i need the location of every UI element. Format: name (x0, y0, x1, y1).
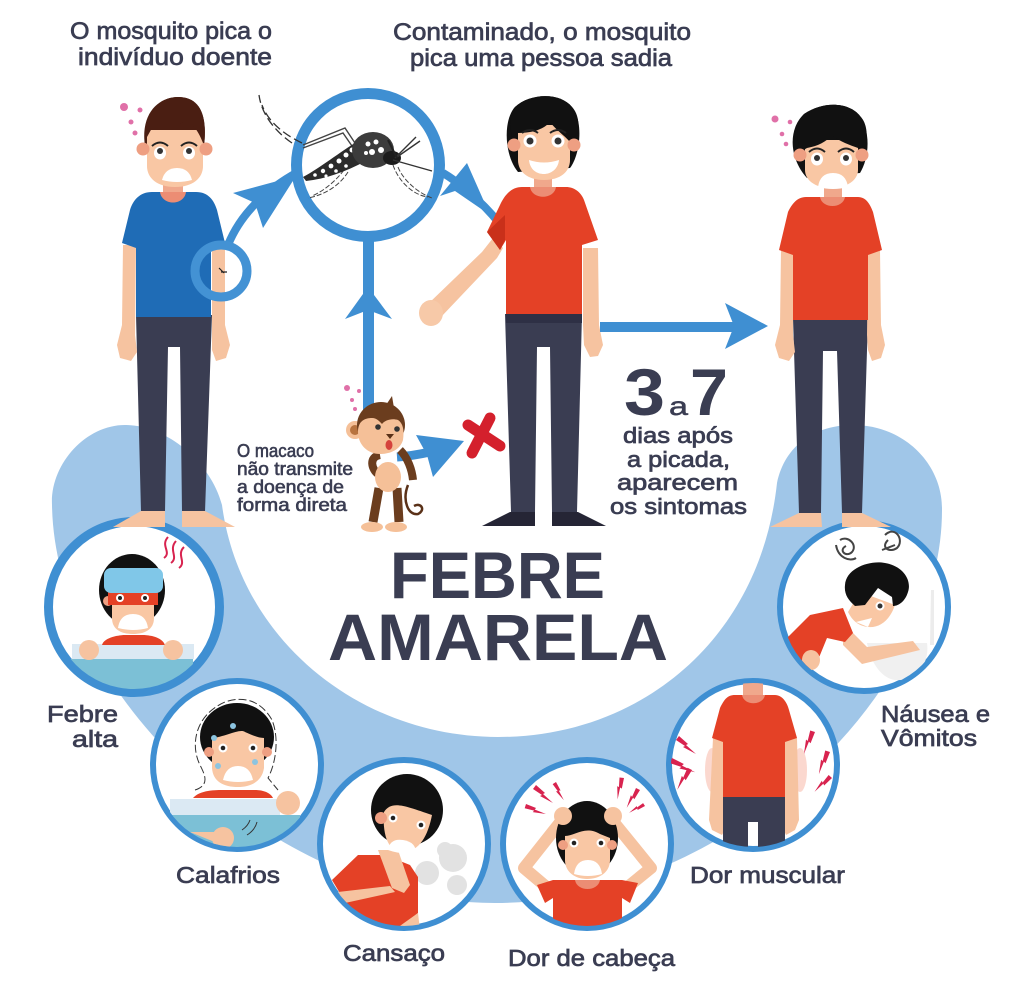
symptom: nausea and vomiting (780, 523, 948, 691)
main title: AMARELA (328, 600, 668, 674)
symptom labels (47, 701, 990, 971)
title: step one (70, 18, 272, 71)
symptom: chills (150, 681, 321, 855)
background crescent (52, 425, 942, 903)
person: sick with blue shirt (117, 97, 230, 512)
symptom labels: Náusea e (881, 701, 990, 727)
person: healthy, bitten (419, 96, 606, 526)
text: 3 a 7 days: 7 (690, 355, 728, 429)
symptom labels: Vômitos (881, 725, 977, 751)
text: 3 a 7 days: a picada, (627, 447, 730, 472)
icon: red X (468, 418, 500, 453)
symptom labels: Dor muscular (690, 862, 845, 888)
arrow: incubation period (600, 303, 768, 349)
text: 3 a 7 days (610, 355, 747, 519)
arrow: monkey does not transmit directly (397, 435, 464, 477)
text: 3 a 7 days: dias após (623, 423, 733, 448)
text: monkey note: a doença de (237, 477, 344, 497)
arrow: sick person to mosquito (228, 172, 298, 245)
text: monkey note: não transmite (237, 459, 353, 479)
symptom labels: Dor de cabeça (508, 945, 675, 971)
main title (328, 538, 668, 674)
main title: FEBRE (390, 538, 605, 612)
title: step two: Contaminado, o mosquito (393, 19, 691, 46)
symptom: tiredness (320, 760, 488, 930)
text: 3 a 7 days: a (669, 391, 689, 421)
symptom labels: Febre (47, 701, 118, 727)
title: step one: indivíduo doente (78, 44, 272, 71)
mosquito ring (259, 94, 440, 236)
symptom labels: alta (72, 726, 118, 752)
bite magnifier ring (195, 245, 247, 297)
title: step one: O mosquito pica o (70, 18, 272, 45)
text: 3 a 7 days: os sintomas (610, 494, 747, 519)
symptom: headache (503, 760, 671, 930)
text: 3 a 7 days: aparecem (617, 470, 738, 495)
text: monkey note (237, 441, 353, 515)
symptom labels: Calafrios (176, 862, 280, 888)
person: sick after incubation (772, 105, 885, 513)
arrow: mosquito to healthy person (440, 163, 500, 224)
text: monkey note: forma direta (237, 495, 348, 515)
icon: monkey (344, 385, 422, 532)
text: 3 a 7 days: 3 (624, 355, 665, 429)
text: monkey note: O macaco (237, 441, 314, 461)
symptom labels: Cansaço (343, 940, 445, 966)
title: step two: pica uma pessoa sadia (410, 45, 673, 72)
symptom: high fever (40, 522, 220, 699)
arrow: monkey to mosquito (345, 240, 392, 410)
title: step two (393, 19, 691, 72)
feet of the figures over the symptom circles (113, 511, 891, 527)
symptom: muscle pain (669, 680, 837, 860)
